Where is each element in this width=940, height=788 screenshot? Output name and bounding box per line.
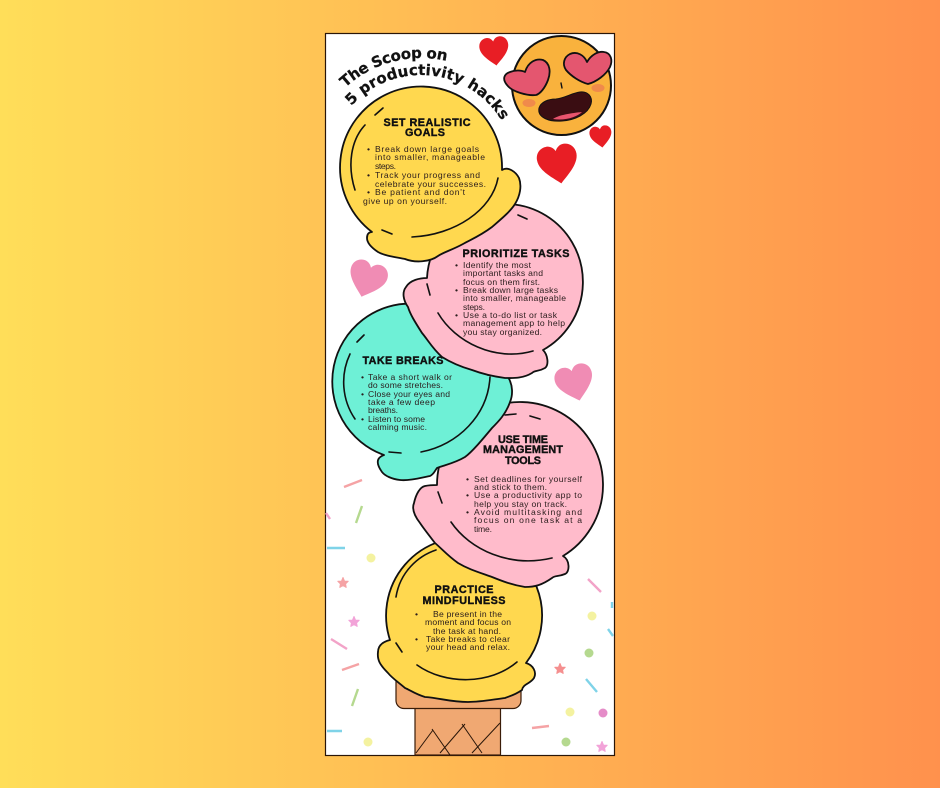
text block [415, 609, 511, 652]
text block: Avoid multitasking and [474, 507, 582, 517]
text block: calming music. [368, 422, 427, 432]
heading: PRIORITIZE TASKS [462, 248, 570, 260]
text block: Track your progress and [375, 170, 480, 180]
title: 5 productivity hacks [344, 64, 508, 120]
scoop: take breaks [332, 304, 512, 480]
heading: USE TIME [498, 434, 548, 446]
text block: Set deadlines for yourself [474, 474, 583, 484]
text block: • [361, 372, 364, 382]
text block [455, 260, 566, 337]
text block: Break down large goals [375, 144, 479, 154]
text block: into smaller, manageable [375, 152, 485, 162]
heading: TAKE BREAKS [362, 355, 444, 367]
text block: • [455, 285, 458, 295]
text block: management app to help [463, 318, 565, 328]
text block: you stay organized. [463, 327, 542, 337]
text block: into smaller, manageable [463, 293, 566, 303]
text block: help you stay on track. [474, 499, 567, 509]
scoop: practice mindfulness [378, 538, 542, 702]
text block: steps. [463, 302, 485, 312]
icon: pink heart right [552, 361, 598, 405]
heading [483, 434, 563, 467]
icon: ice cream cone [395, 681, 522, 756]
text block [363, 144, 486, 206]
text block: Be present in the [433, 609, 502, 619]
icon: red heart small [589, 125, 613, 149]
text block: the task at hand. [433, 626, 501, 636]
scoop: use time management tools [413, 402, 603, 587]
text block: • [415, 634, 418, 644]
text block: • [367, 187, 370, 197]
text block: • [367, 144, 370, 154]
text block [361, 372, 452, 432]
text block: focus on them first. [463, 277, 540, 287]
icon: red heart large [535, 142, 581, 187]
heading [384, 117, 471, 139]
heading: GOALS [405, 127, 445, 139]
heading: SET REALISTIC [384, 117, 471, 129]
heading [422, 584, 506, 607]
sprinkles confetti [326, 480, 613, 751]
text block: do some stretches. [368, 380, 443, 390]
text block: important tasks and [463, 268, 543, 278]
text block: give up on yourself. [363, 196, 447, 206]
text block [466, 474, 583, 534]
text block: celebrate your successes. [375, 179, 486, 189]
text block: • [455, 260, 458, 270]
scoop: prioritize tasks [404, 204, 583, 378]
text block: Be patient and don't [375, 187, 466, 197]
text block: breaths. [368, 405, 398, 415]
text block: Identify the most [463, 260, 532, 270]
text block: Listen to some [368, 414, 425, 424]
text block: • [415, 609, 418, 619]
text block: • [466, 507, 469, 517]
text block: moment and focus on [425, 617, 511, 627]
icon: red heart top [478, 35, 511, 67]
infographic panel [326, 34, 614, 756]
text block: Break down large tasks [463, 285, 558, 295]
text block: steps. [375, 161, 396, 171]
heading: PRACTICE [434, 584, 494, 596]
text block: time. [474, 524, 492, 534]
icon: pink heart left [343, 257, 391, 303]
text block: your head and relax. [426, 642, 510, 652]
icon: heart-eyes emoji [504, 36, 611, 135]
text block: take a few deep [368, 397, 435, 407]
text block: focus on one task at a [474, 515, 582, 525]
text block: • [361, 414, 364, 424]
title: The Scoop on [338, 50, 447, 86]
text block: Take a short walk or [368, 372, 452, 382]
text block: and stick to them. [474, 482, 547, 492]
text block: • [367, 170, 370, 180]
text block: • [361, 389, 364, 399]
scoop: set realistic goals [340, 87, 520, 261]
text block: • [466, 490, 469, 500]
heading: TOOLS [505, 455, 541, 467]
text block: • [455, 310, 458, 320]
text block: • [466, 474, 469, 484]
heading: MANAGEMENT [483, 444, 563, 456]
text block: Use a to-do list or task [463, 310, 558, 320]
text block: Take breaks to clear [426, 634, 510, 644]
heading: MINDFULNESS [422, 595, 506, 607]
text block: Close your eyes and [368, 389, 450, 399]
text block: Use a productivity app to [474, 490, 582, 500]
